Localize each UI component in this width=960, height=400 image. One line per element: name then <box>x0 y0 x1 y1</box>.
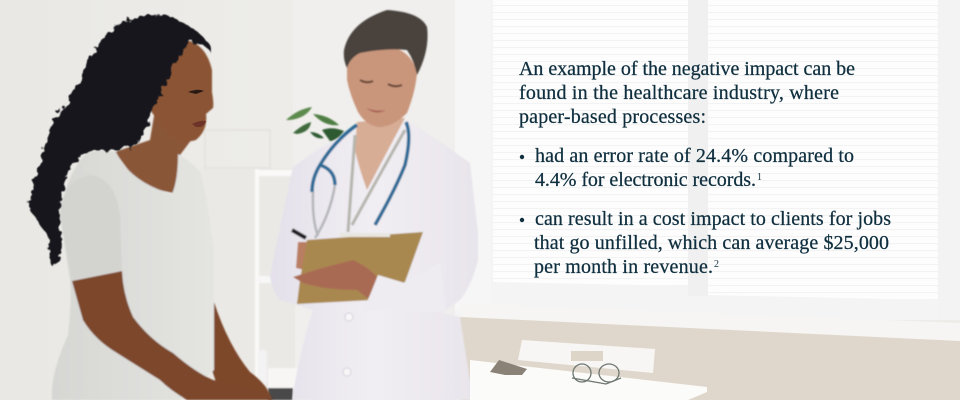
background: shelf unit <box>200 130 298 400</box>
bullet: error rate: 1 <box>757 172 762 183</box>
doctor eyes <box>360 80 402 86</box>
patient far arm <box>212 302 272 400</box>
icon: green plant <box>286 107 344 141</box>
patient eye <box>188 90 204 94</box>
icon: photo on desk <box>490 360 527 375</box>
patient t-shirt <box>52 150 214 400</box>
doctor coat <box>270 120 478 400</box>
patient hair <box>30 15 212 266</box>
patient near arm <box>72 271 273 400</box>
patient face <box>150 40 213 142</box>
background: white chair <box>518 340 655 373</box>
intro paragraph: paper-based processes: <box>519 106 706 128</box>
doctor sleeve cuff <box>363 262 446 312</box>
patient sleeve shade <box>60 175 122 280</box>
patient lips <box>192 121 206 127</box>
background: desk <box>470 360 707 400</box>
background: beige wall under window <box>460 316 960 400</box>
pen <box>292 230 306 238</box>
bullet: cost impact: 2 <box>714 259 719 270</box>
doctor right fingers <box>296 242 308 270</box>
stethoscope <box>312 122 409 238</box>
intro paragraph: found in the healthcare industry, where <box>519 82 839 104</box>
patient neck and chest <box>115 110 195 194</box>
text block: healthcare impact <box>519 58 891 278</box>
background: window sill <box>460 303 960 341</box>
doctor face <box>347 46 417 127</box>
bullet: error rate: had an error rate of 24.4% compared to <box>535 145 854 167</box>
doctor neck and top <box>355 118 405 190</box>
bullet: error rate: 4.4% for electronic records. <box>535 169 756 191</box>
bullet: cost impact <box>520 208 891 278</box>
photo: doctor <box>270 10 478 400</box>
doctor hair <box>344 10 428 75</box>
coat buttons <box>345 313 353 321</box>
clipboard <box>297 232 423 304</box>
intro paragraph <box>519 58 855 128</box>
intro paragraph: An example of the negative impact can be <box>519 58 855 80</box>
bullet: cost impact: that go unfilled, which can average $25,000 <box>534 232 889 254</box>
bullet: cost impact: per month in revenue. <box>534 256 713 278</box>
photo: patient woman <box>30 15 273 400</box>
icon: glasses <box>572 364 621 384</box>
background: window with blinds <box>455 0 960 320</box>
bullet: error rate <box>520 145 854 191</box>
doctor lips <box>366 108 386 113</box>
doctor left hand <box>293 260 377 300</box>
bullet: cost impact: can result in a cost impact to clients for jobs <box>535 208 891 230</box>
